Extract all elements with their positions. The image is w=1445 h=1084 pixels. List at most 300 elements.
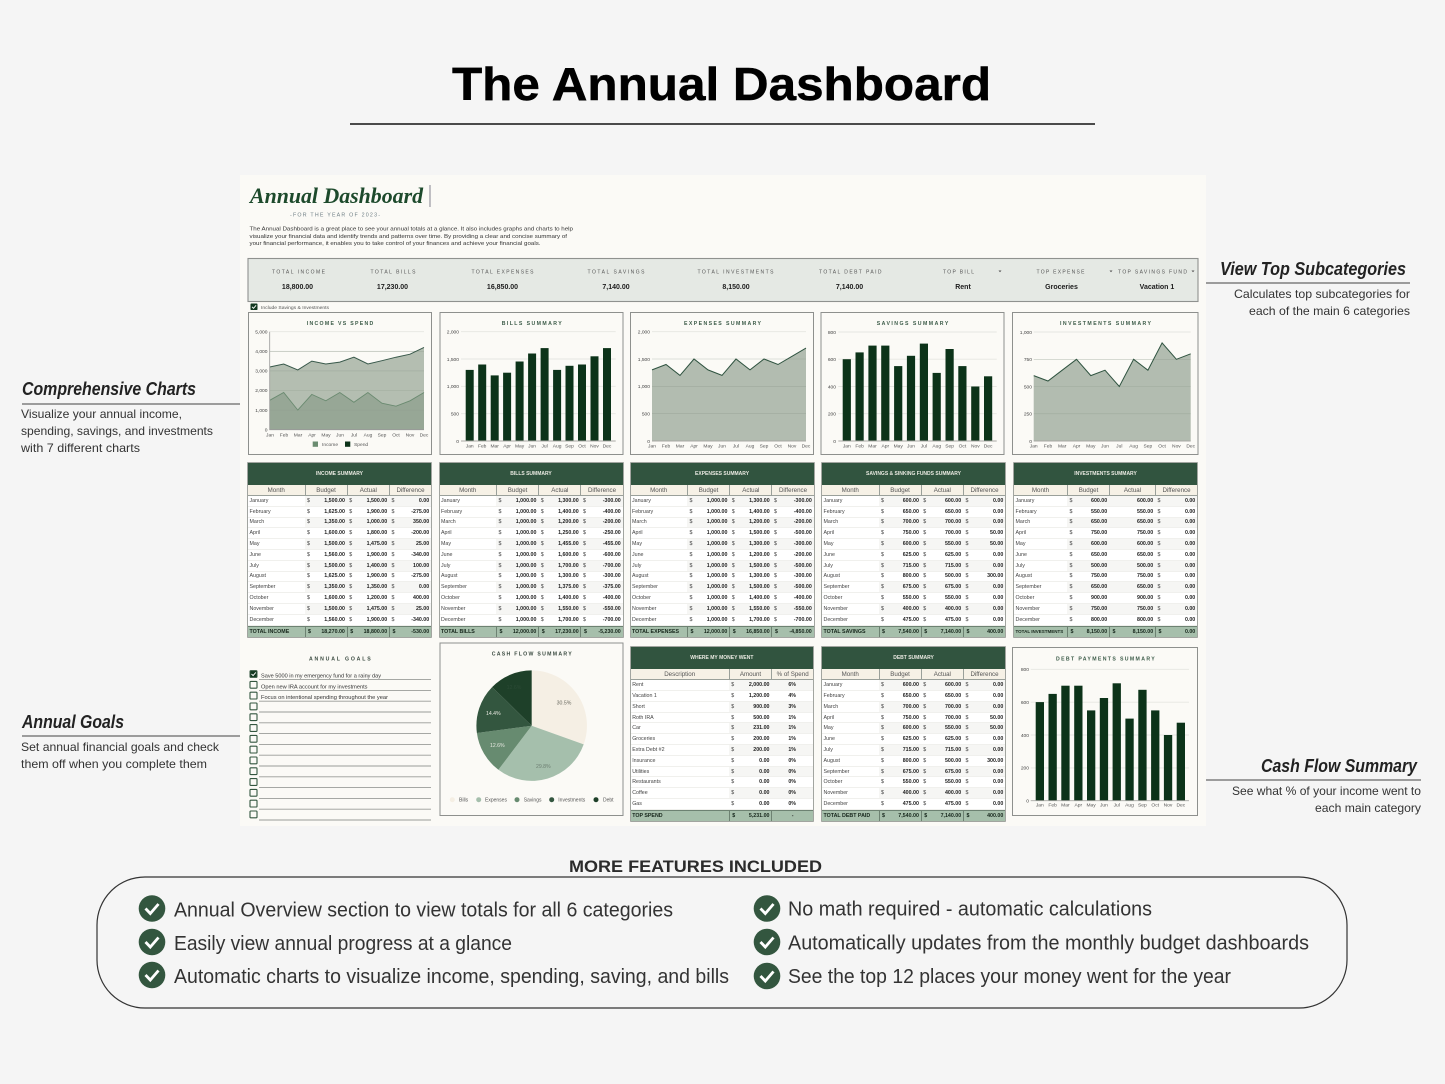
table: bills summary: $ xyxy=(541,573,544,579)
table: debt summary: $ xyxy=(881,736,884,742)
table: debt summary xyxy=(822,647,1005,821)
table: expenses summary: 1,700.00 xyxy=(749,617,770,623)
table: savings and sinking funds summary: $ xyxy=(965,584,968,590)
chart: savings summary: May xyxy=(894,444,903,450)
table: income summary: 400.00 xyxy=(413,595,429,601)
table: expenses summary: June xyxy=(632,552,644,558)
table: expenses summary: Budget xyxy=(699,486,718,494)
table: investments summary: $ xyxy=(1158,541,1160,547)
table: savings and sinking funds summary: Difference xyxy=(970,486,999,494)
table: income summary: 1,500.00 xyxy=(324,541,345,547)
table: bills summary: $ xyxy=(583,552,586,558)
table: expenses summary: -200.00 xyxy=(794,519,812,525)
table: savings and sinking funds summary: February xyxy=(824,509,845,515)
table: bills summary: -400.00 xyxy=(603,509,621,515)
table: where my money went: Vacation 1 xyxy=(632,693,657,699)
annual overview band: 16,850.00 xyxy=(487,284,518,291)
chart: bills summary: Oct xyxy=(578,444,586,450)
pie legend: Debt xyxy=(603,798,614,804)
table: income summary: 350.00 xyxy=(413,519,429,525)
table: expenses summary: $ xyxy=(774,606,777,612)
table: debt summary: $ xyxy=(965,736,968,742)
chart: debt payments summary: Jan xyxy=(1036,802,1044,808)
table: expenses summary: 1,000.00 xyxy=(707,541,727,547)
table: investments summary: 650.00 xyxy=(1137,584,1153,590)
table: income summary: $ xyxy=(307,573,310,579)
table: debt summary: $ xyxy=(881,779,884,785)
annual overview band: TOTAL INVESTMENTS xyxy=(698,269,774,275)
table: investments summary: $ xyxy=(1070,530,1072,536)
table: investments summary: May xyxy=(1016,541,1026,547)
chart: income vs spend: 1,000 xyxy=(255,408,268,414)
table: expenses summary: 1,000.00 xyxy=(707,617,727,623)
chart: cash flow summary pie: 12.6% xyxy=(507,685,522,691)
table: income summary: June xyxy=(250,552,261,558)
table: income summary: 1,625.00 xyxy=(324,573,345,579)
chart: income vs spend: Dec xyxy=(420,432,429,438)
table: investments summary: 750.00 xyxy=(1137,573,1153,579)
table: income summary: $ xyxy=(391,552,394,558)
table: expenses summary: November xyxy=(632,606,656,612)
table: savings and sinking funds summary: 400.00 xyxy=(945,606,961,612)
table: income summary: Month xyxy=(268,486,285,494)
pie legend: Savings xyxy=(524,798,542,804)
table: investments summary: TOTAL INVESTMENTS xyxy=(1016,629,1063,634)
table: debt summary: 0.00 xyxy=(993,747,1003,753)
table: investments summary: 550.00 xyxy=(1091,509,1107,515)
table: expenses summary: 1,000.00 xyxy=(707,563,727,569)
chart: bills summary: May xyxy=(515,444,525,450)
table: where my money went: 0% xyxy=(788,758,796,764)
table: debt summary: 550.00 xyxy=(903,779,919,785)
table: bills summary: 1,250.00 xyxy=(558,530,579,536)
table: bills summary: $ xyxy=(498,595,501,601)
table: debt summary: May xyxy=(824,725,834,731)
table: income summary: March xyxy=(250,519,264,525)
panel: annual goals: Focus on intentional spending throughout the year xyxy=(261,695,388,701)
chart: savings summary: SAVINGS SUMMARY xyxy=(877,321,949,327)
table: income summary: 25.00 xyxy=(416,541,429,547)
pie slices xyxy=(476,670,587,781)
table: expenses summary: February xyxy=(632,509,653,515)
table: where my money went: Insurance xyxy=(632,758,655,764)
annual overview band: Rent xyxy=(955,284,971,291)
feature: annual overview: Annual Overview section to view totals for all 6 categories xyxy=(174,900,673,922)
table: debt summary: $ xyxy=(965,715,968,721)
table: investments summary: $ xyxy=(1070,563,1072,569)
table: investments summary: 600.00 xyxy=(1091,541,1107,547)
chart: savings summary: 200 xyxy=(828,412,836,418)
sheet description: your financial performance, it enables you to take control of your finances and achieve your financial goals. xyxy=(250,241,541,247)
table: expenses summary: 12,000.00 xyxy=(704,629,727,635)
table: bills summary: February xyxy=(441,509,462,515)
table: debt summary: $ xyxy=(965,779,968,785)
table: bills summary: $ xyxy=(498,498,501,504)
table: savings and sinking funds summary: 0.00 xyxy=(993,552,1003,558)
chart: expenses summary: 500 xyxy=(642,412,650,418)
table: savings and sinking funds summary: July xyxy=(824,563,833,569)
table: debt summary: $ xyxy=(965,747,968,753)
chart: bills summary: 500 xyxy=(451,412,459,418)
table: expenses summary: $ xyxy=(690,498,692,504)
table: savings and sinking funds summary: $ xyxy=(965,606,968,612)
table: savings and sinking funds summary: $ xyxy=(965,541,968,547)
chart: expenses summary: Dec xyxy=(802,444,811,450)
table: bills summary: 1,000.00 xyxy=(516,563,536,569)
table: bills summary: 1,000.00 xyxy=(516,606,536,612)
table: investments summary: $ xyxy=(1158,617,1160,623)
table: debt summary: $ xyxy=(882,813,885,819)
chart: expenses summary: 1,000 xyxy=(638,384,650,390)
chart: income vs spend: 5,000 xyxy=(255,330,268,336)
table: debt summary: 400.00 xyxy=(945,790,961,796)
table: savings and sinking funds summary: April xyxy=(824,530,834,536)
table: bills summary: 1,000.00 xyxy=(516,541,536,547)
table: bills summary: December xyxy=(441,617,465,623)
table: investments summary: $ xyxy=(1158,563,1160,569)
table: expenses summary: 1,000.00 xyxy=(707,606,727,612)
table: bills summary: -200.00 xyxy=(603,519,621,525)
table: income summary: 1,900.00 xyxy=(367,509,387,515)
table: expenses summary: January xyxy=(632,498,651,504)
table: where my money went: Short xyxy=(632,704,645,710)
chart: investments summary: 0 xyxy=(1029,439,1032,445)
table: investments summary: June xyxy=(1016,552,1027,558)
table: bills summary: $ xyxy=(541,519,544,525)
table: investments summary: 0.00 xyxy=(1185,552,1195,558)
table: where my money went: TOP SPEND xyxy=(632,813,663,819)
table: where my money went: 1,200.00 xyxy=(749,693,769,699)
table: debt summary: $ xyxy=(965,725,968,731)
table: expenses summary: $ xyxy=(732,606,735,612)
table: debt summary: November xyxy=(824,790,848,796)
chart: bills summary: 1,000 xyxy=(447,384,459,390)
table: income summary: 0.00 xyxy=(419,498,429,504)
table: expenses summary: $ xyxy=(690,519,692,525)
table: expenses summary: $ xyxy=(732,498,735,504)
pie legend: Investments xyxy=(558,798,586,804)
table: savings and sinking funds summary: Month xyxy=(842,486,859,494)
table: bills summary: March xyxy=(441,519,456,525)
chart: savings summary: Nov xyxy=(971,444,980,450)
chart: debt payments summary: Feb xyxy=(1048,802,1057,808)
chart: bills summary: 2,000 xyxy=(447,330,459,336)
table: where my money went: 0.00 xyxy=(759,769,769,775)
table: debt summary: 7,140.00 xyxy=(941,813,961,819)
table: debt summary: $ xyxy=(965,769,968,775)
table: savings and sinking funds summary: $ xyxy=(881,606,884,612)
table: expenses summary: 1,000.00 xyxy=(707,595,727,601)
chart: debt payments summary: Jun xyxy=(1100,802,1108,808)
sheet description: visualize your financial data and identify trends and patterns over time. By providing a clear and concise summary of xyxy=(250,234,567,240)
table: income summary: $ xyxy=(349,584,352,590)
table: income summary: 1,560.00 xyxy=(324,617,345,623)
table: debt summary: $ xyxy=(923,801,926,807)
table: income summary: April xyxy=(250,530,260,536)
table: bills summary: $ xyxy=(541,509,544,515)
chart: income vs spend: 2,000 xyxy=(255,388,268,394)
table: investments summary: April xyxy=(1016,530,1026,536)
table: investments summary: 650.00 xyxy=(1091,552,1107,558)
chart: expenses summary: Feb xyxy=(662,444,670,450)
table: bills summary: $ xyxy=(541,617,544,623)
sheet heading: -FOR THE YEAR OF 2023- xyxy=(290,212,380,218)
chart: bills summary: Jan xyxy=(466,444,474,450)
chart: expenses summary: Jan xyxy=(648,444,656,450)
chart: savings summary: Oct xyxy=(959,444,967,450)
table: where my money went: $ xyxy=(731,769,734,775)
table: debt summary: Difference xyxy=(970,671,999,678)
table: income summary: $ xyxy=(307,509,310,515)
table: debt summary: 0.00 xyxy=(993,790,1003,796)
chart: debt payments summary: 0 xyxy=(1026,798,1029,804)
table: debt summary: $ xyxy=(881,790,884,796)
table: savings and sinking funds summary: 500.00 xyxy=(945,573,961,579)
callout: comprehensive charts: with 7 different charts xyxy=(20,441,140,455)
pie legend: Bills xyxy=(459,798,469,804)
table: income summary: December xyxy=(250,617,274,623)
table: where my money went: $ xyxy=(731,758,734,764)
table: debt summary: $ xyxy=(881,769,884,775)
table: investments summary: July xyxy=(1016,563,1025,569)
table: investments summary: 0.00 xyxy=(1185,563,1195,569)
table: bills summary: 1,300.00 xyxy=(558,498,579,504)
table: savings and sinking funds summary: 475.00 xyxy=(903,617,919,623)
table: income summary xyxy=(248,463,431,637)
chart: debt payments summary: Sep xyxy=(1138,802,1147,808)
table: bills summary: $ xyxy=(583,584,586,590)
table: expenses summary: -4,850.00 xyxy=(789,629,812,635)
table: bills summary: $ xyxy=(583,530,586,536)
table: where my money went: - xyxy=(792,813,794,819)
table: debt summary: 300.00 xyxy=(987,758,1003,764)
table: bills summary: $ xyxy=(498,509,501,515)
table: debt summary: 0.00 xyxy=(993,801,1003,807)
table: expenses summary: 1,400.00 xyxy=(749,595,770,601)
table: investments summary: 600.00 xyxy=(1091,498,1107,504)
table: bills summary: 1,000.00 xyxy=(516,584,536,590)
table: expenses summary: -300.00 xyxy=(794,573,812,579)
table: income summary: $ xyxy=(391,584,394,590)
table: savings and sinking funds summary: SAVINGS & SINKING FUNDS SUMMARY xyxy=(866,471,961,477)
table: expenses summary: $ xyxy=(732,509,735,515)
table: where my money went: $ xyxy=(731,715,734,721)
table: investments summary: Month xyxy=(1032,486,1049,494)
chart: investments summary: Jan xyxy=(1030,444,1038,450)
table: where my money went: 4% xyxy=(788,693,796,699)
table: income summary: -275.00 xyxy=(411,509,429,515)
table: where my money went: 500.00 xyxy=(753,715,769,721)
chart: income vs spend: 3,000 xyxy=(255,369,268,375)
chart: expenses summary: 0 xyxy=(647,439,650,445)
table: investments summary: $ xyxy=(1158,584,1160,590)
table: bills summary: 1,700.00 xyxy=(558,563,579,569)
table: expenses summary: -300.00 xyxy=(794,541,812,547)
table: investments summary: December xyxy=(1016,617,1040,623)
table: savings and sinking funds summary: $ xyxy=(924,629,927,635)
table: savings and sinking funds summary: November xyxy=(824,606,848,612)
chart: income vs spend: 4,000 xyxy=(255,349,268,355)
table: income summary: $ xyxy=(349,595,352,601)
panel: more features xyxy=(97,877,1347,1008)
chart: debt payments summary: DEBT PAYMENTS SUMMARY xyxy=(1056,656,1155,662)
table: where my money went: 6% xyxy=(788,682,796,688)
table: expenses summary: 1,000.00 xyxy=(707,573,727,579)
table: savings and sinking funds summary: $ xyxy=(881,509,884,515)
table: bills summary: $ xyxy=(500,629,502,635)
table: debt summary: $ xyxy=(881,682,884,688)
table: debt summary: 400.00 xyxy=(903,790,919,796)
table: income summary: 1,800.00 xyxy=(367,530,387,536)
table: investments summary: 550.00 xyxy=(1137,509,1153,515)
table: debt summary: 0.00 xyxy=(993,769,1003,775)
table: investments summary: 800.00 xyxy=(1091,617,1107,623)
chart: investments summary: Jul xyxy=(1116,444,1122,450)
table: investments summary: August xyxy=(1016,573,1032,579)
table: where my money went: Description xyxy=(664,671,695,678)
table: debt summary: 650.00 xyxy=(945,693,961,699)
table: savings and sinking funds summary: 0.00 xyxy=(993,595,1003,601)
table: bills summary: -375.00 xyxy=(603,584,621,590)
table: debt summary: $ xyxy=(923,747,926,753)
table: bills summary: 1,000.00 xyxy=(516,617,536,623)
table: bills summary: $ xyxy=(498,573,501,579)
table: savings and sinking funds summary: 600.00 xyxy=(903,498,919,504)
table: savings and sinking funds summary: 7,540.00 xyxy=(898,629,919,635)
callout: cash flow summary: See what % of your income went to xyxy=(1232,784,1421,798)
table: bills summary: $ xyxy=(498,617,501,623)
chart: savings summary: Jul xyxy=(921,444,927,450)
table: income summary: $ xyxy=(349,563,352,569)
chart: income vs spend: Nov xyxy=(406,432,415,438)
table: debt summary: 550.00 xyxy=(945,725,961,731)
table: income summary: Actual xyxy=(360,486,377,494)
table: where my money went: Car xyxy=(632,725,641,731)
chart: savings summary: Sep xyxy=(945,444,954,450)
table: where my money went: 5,231.00 xyxy=(749,813,769,819)
table: savings and sinking funds summary: $ xyxy=(923,509,926,515)
chart: debt payments summary: Apr xyxy=(1074,802,1082,808)
annual overview band: TOTAL INCOME xyxy=(272,269,326,275)
table: bills summary: Difference xyxy=(588,486,616,494)
table: debt summary: September xyxy=(824,769,849,775)
table: income summary: July xyxy=(250,563,259,569)
toggle: include savings and investments xyxy=(250,304,330,311)
table: savings and sinking funds summary: 0.00 xyxy=(993,584,1003,590)
table: where my money went: 900.00 xyxy=(753,704,769,710)
table: investments summary: Difference xyxy=(1162,486,1191,494)
callout: comprehensive charts xyxy=(20,379,240,455)
table: bills summary: 1,000.00 xyxy=(516,530,536,536)
table: expenses summary: Actual xyxy=(742,486,759,494)
table: income summary: $ xyxy=(307,595,310,601)
table: where my money went: Rent xyxy=(632,682,643,688)
table: where my money went: $ xyxy=(731,790,734,796)
table: expenses summary: $ xyxy=(732,519,735,525)
table: savings and sinking funds summary: $ xyxy=(881,617,884,623)
table: debt summary: 400.00 xyxy=(987,813,1003,819)
table: debt summary: $ xyxy=(923,693,926,699)
table: debt summary: $ xyxy=(965,758,968,764)
table: investments summary: 750.00 xyxy=(1137,530,1153,536)
table: bills summary: 1,375.00 xyxy=(558,584,579,590)
table: savings and sinking funds summary: Actual xyxy=(934,486,951,494)
table: investments summary: INVESTMENTS SUMMARY xyxy=(1074,471,1137,477)
table: savings and sinking funds summary: December xyxy=(824,617,848,623)
table: income summary: $ xyxy=(349,541,352,547)
table: investments summary: 750.00 xyxy=(1091,530,1107,536)
chart: expenses summary: Aug xyxy=(746,444,755,450)
table: savings and sinking funds summary: 0.00 xyxy=(993,519,1003,525)
table: bills summary: 12,000.00 xyxy=(513,629,536,635)
annual overview band: 7,140.00 xyxy=(836,284,863,291)
table: investments summary: $ xyxy=(1158,573,1160,579)
chart: cash flow summary pie: 30.5% xyxy=(557,700,572,706)
table: savings and sinking funds summary: $ xyxy=(881,552,884,558)
chart: savings summary: 800 xyxy=(828,330,836,336)
table: investments summary: $ xyxy=(1070,606,1072,612)
table: savings and sinking funds summary: 600.00 xyxy=(945,498,961,504)
chart: cash flow summary pie: 12.6% xyxy=(490,743,505,749)
table: where my money went: $ xyxy=(731,736,734,742)
table: investments summary: 0.00 xyxy=(1185,606,1195,612)
table: where my money went: Restaurants xyxy=(632,779,661,785)
table: income summary: 1,500.00 xyxy=(324,606,345,612)
chart legend xyxy=(313,442,368,448)
chart: debt payments summary: Aug xyxy=(1125,802,1134,808)
table: bills summary: Month xyxy=(459,486,476,494)
chart: savings summary: Apr xyxy=(881,444,889,450)
table: debt summary: $ xyxy=(924,813,927,819)
table: expenses summary: $ xyxy=(774,509,777,515)
chart: savings summary: Jun xyxy=(907,444,915,450)
table: investments summary: March xyxy=(1016,519,1030,525)
table: income summary: 1,350.00 xyxy=(324,584,345,590)
table: investments summary: 650.00 xyxy=(1091,519,1107,525)
table: income summary: 1,500.00 xyxy=(367,498,387,504)
table: debt summary: 800.00 xyxy=(903,758,919,764)
table: investments summary: November xyxy=(1016,606,1040,612)
table: savings and sinking funds summary: $ xyxy=(881,519,884,525)
table: debt summary: 50.00 xyxy=(990,725,1003,731)
table: expenses summary: $ xyxy=(733,629,736,635)
table: savings and sinking funds summary: $ xyxy=(965,573,968,579)
table: bills summary: 1,000.00 xyxy=(516,595,536,601)
table: bills summary: 1,000.00 xyxy=(516,519,536,525)
table: bills summary: $ xyxy=(583,573,586,579)
table: income summary: 1,900.00 xyxy=(367,617,387,623)
table: savings and sinking funds summary: 650.00 xyxy=(903,509,919,515)
table: bills summary: -455.00 xyxy=(603,541,621,547)
table: savings and sinking funds summary: March xyxy=(824,519,838,525)
table: bills summary: -300.00 xyxy=(603,573,621,579)
table: debt summary: January xyxy=(824,682,842,688)
table: income summary: $ xyxy=(391,606,394,612)
table: income summary: $ xyxy=(391,509,394,515)
table: bills summary: Budget xyxy=(508,486,527,494)
table: debt summary: 0.00 xyxy=(993,682,1003,688)
table: investments summary: 0.00 xyxy=(1185,595,1195,601)
title: The Annual Dashboard xyxy=(452,58,991,110)
table: savings and sinking funds summary: 0.00 xyxy=(993,498,1003,504)
table: investments summary: $ xyxy=(1158,498,1160,504)
table: investments summary: $ xyxy=(1070,552,1072,558)
table: savings and sinking funds summary: 400.00 xyxy=(987,629,1003,635)
table: bills summary: January xyxy=(441,498,460,504)
chart: bills summary: Jul xyxy=(541,444,548,450)
table: bills summary: -700.00 xyxy=(603,617,621,623)
chart: investments summary: Sep xyxy=(1144,444,1153,450)
